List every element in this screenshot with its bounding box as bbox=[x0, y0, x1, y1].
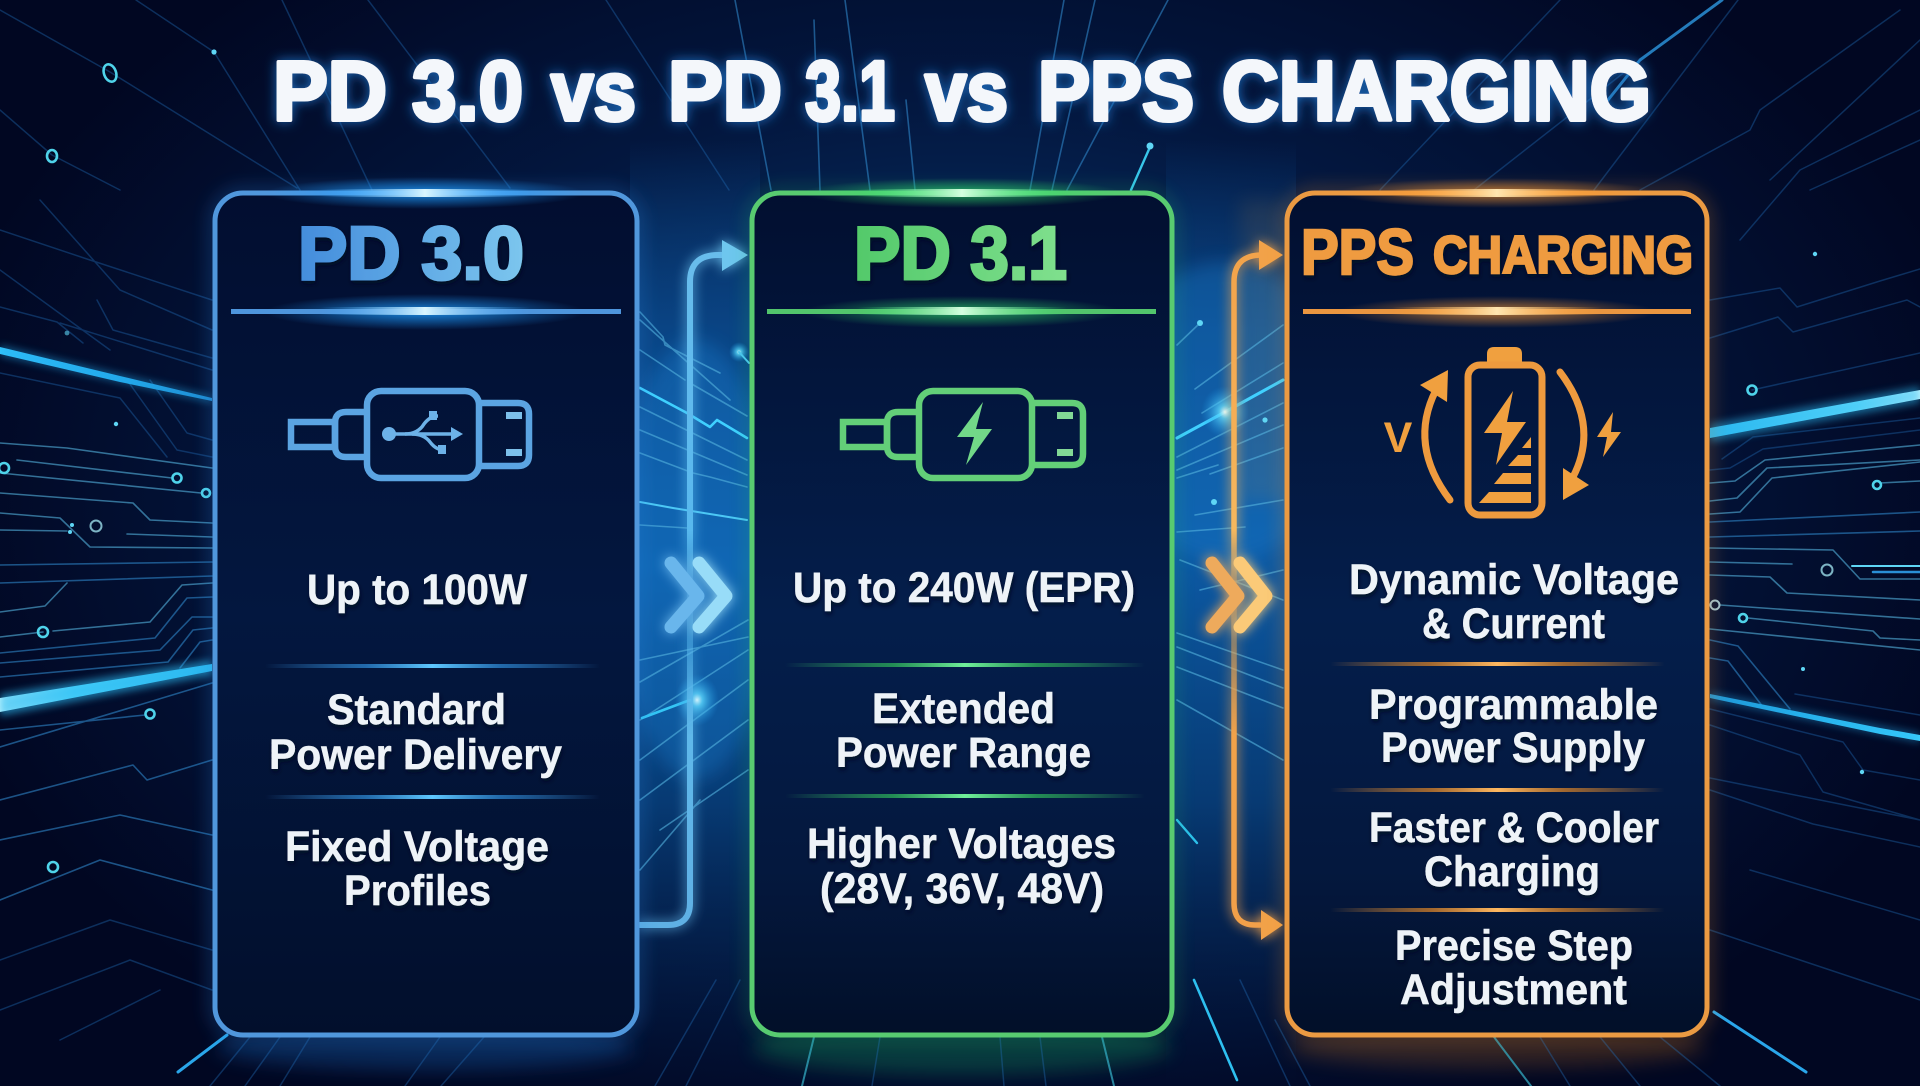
text: Standard Power Delivery bbox=[269, 686, 562, 779]
icon: charging plug bbox=[843, 391, 1083, 478]
USB symbol bbox=[382, 411, 463, 454]
separator bbox=[1330, 788, 1665, 792]
heading: PD 3.0 bbox=[298, 211, 524, 295]
text: Dynamic Voltage & Current: & Current bbox=[1422, 600, 1605, 648]
text: Higher Voltages bbox=[807, 820, 1116, 913]
title: vs bbox=[925, 44, 1008, 138]
title: PD bbox=[273, 44, 387, 138]
panel: PPS Charging bbox=[1287, 178, 1707, 1035]
text: Fixed Voltage Profiles: Profiles bbox=[344, 867, 491, 915]
text: Fixed Voltage Profiles bbox=[285, 823, 549, 915]
text: Precise Step Adjustment: Precise Step bbox=[1395, 922, 1633, 970]
text: Faster & Cooler Charging: Faster & Cooler bbox=[1369, 804, 1659, 852]
icon: USB plug bbox=[291, 391, 529, 478]
title: vs bbox=[551, 44, 636, 138]
title: 3.0 bbox=[412, 44, 523, 138]
chevrons: orange bbox=[1212, 563, 1266, 627]
separator bbox=[785, 794, 1145, 798]
separator bbox=[265, 795, 600, 799]
right circuit lines bbox=[1710, 110, 1920, 1000]
title: 3.1 bbox=[805, 44, 895, 138]
V label: V bbox=[1384, 414, 1413, 462]
panel frame bbox=[215, 177, 637, 1035]
chevrons: blue bbox=[671, 563, 726, 627]
text: Extended Power Range bbox=[836, 685, 1091, 777]
text: Faster & Cooler Charging bbox=[1369, 804, 1659, 896]
middle gap lines bbox=[640, 312, 1283, 870]
text: Extended Power Range: Power Range bbox=[836, 729, 1091, 777]
separator bbox=[785, 663, 1145, 667]
text: Up to 240W (EPR): Up to 240W (EPR) bbox=[793, 564, 1135, 612]
left circuit lines bbox=[0, 200, 212, 1040]
text: Programmable Power Supply: Power Supply bbox=[1381, 724, 1645, 772]
separator bbox=[1330, 662, 1665, 666]
heading bbox=[1301, 216, 1693, 288]
bottom rays bbox=[178, 980, 1806, 1086]
text: Programmable Power Supply bbox=[1369, 681, 1658, 772]
title: PD bbox=[668, 44, 782, 138]
text: Higher Voltages: (28V, 36V, 48V) bbox=[820, 865, 1104, 913]
heading divider bbox=[231, 294, 621, 330]
separator bbox=[1330, 908, 1665, 912]
text: Standard Power Delivery: Power Delivery bbox=[269, 731, 562, 779]
separator bbox=[265, 664, 600, 668]
text: Dynamic Voltage & Current: Dynamic Voltage bbox=[1349, 556, 1679, 604]
text: Fixed Voltage Profiles: Fixed Voltage bbox=[285, 823, 549, 871]
title: PPS bbox=[1038, 44, 1194, 138]
text: Standard Power Delivery: Standard bbox=[327, 686, 506, 734]
title: CHARGING bbox=[1222, 44, 1651, 138]
heading divider bbox=[767, 296, 1156, 328]
heading divider bbox=[1303, 296, 1691, 328]
text: Precise Step Adjustment bbox=[1395, 922, 1633, 1014]
title bbox=[273, 44, 1651, 138]
heading: CHARGING bbox=[1433, 226, 1693, 285]
panel frame bbox=[752, 178, 1172, 1035]
text: Dynamic Voltage & Current bbox=[1349, 556, 1679, 648]
text: Faster & Cooler Charging: Charging bbox=[1424, 848, 1600, 896]
panel frame bbox=[1287, 178, 1707, 1035]
top rays bbox=[0, 0, 1920, 190]
heading: PD 3.1 bbox=[854, 211, 1067, 295]
panel: PD 3.0 bbox=[215, 177, 637, 1035]
connector arrow: PD 3.1 to PPS top bbox=[1234, 240, 1283, 940]
text: Higher Voltages: Higher Voltages bbox=[807, 820, 1116, 868]
text: Precise Step Adjustment: Adjustment bbox=[1400, 966, 1627, 1014]
text: Extended Power Range: Extended bbox=[872, 685, 1055, 733]
text: Programmable Power Supply: Programmable bbox=[1369, 681, 1658, 729]
heading: PPS bbox=[1301, 216, 1414, 288]
icon: battery with cycle arrows bbox=[1384, 347, 1621, 515]
text: Up to 100W: Up to 100W bbox=[307, 566, 527, 614]
connector arrow: PD 3.0 to PD 3.1 bbox=[640, 240, 748, 925]
panel: PD 3.1 bbox=[752, 178, 1172, 1035]
